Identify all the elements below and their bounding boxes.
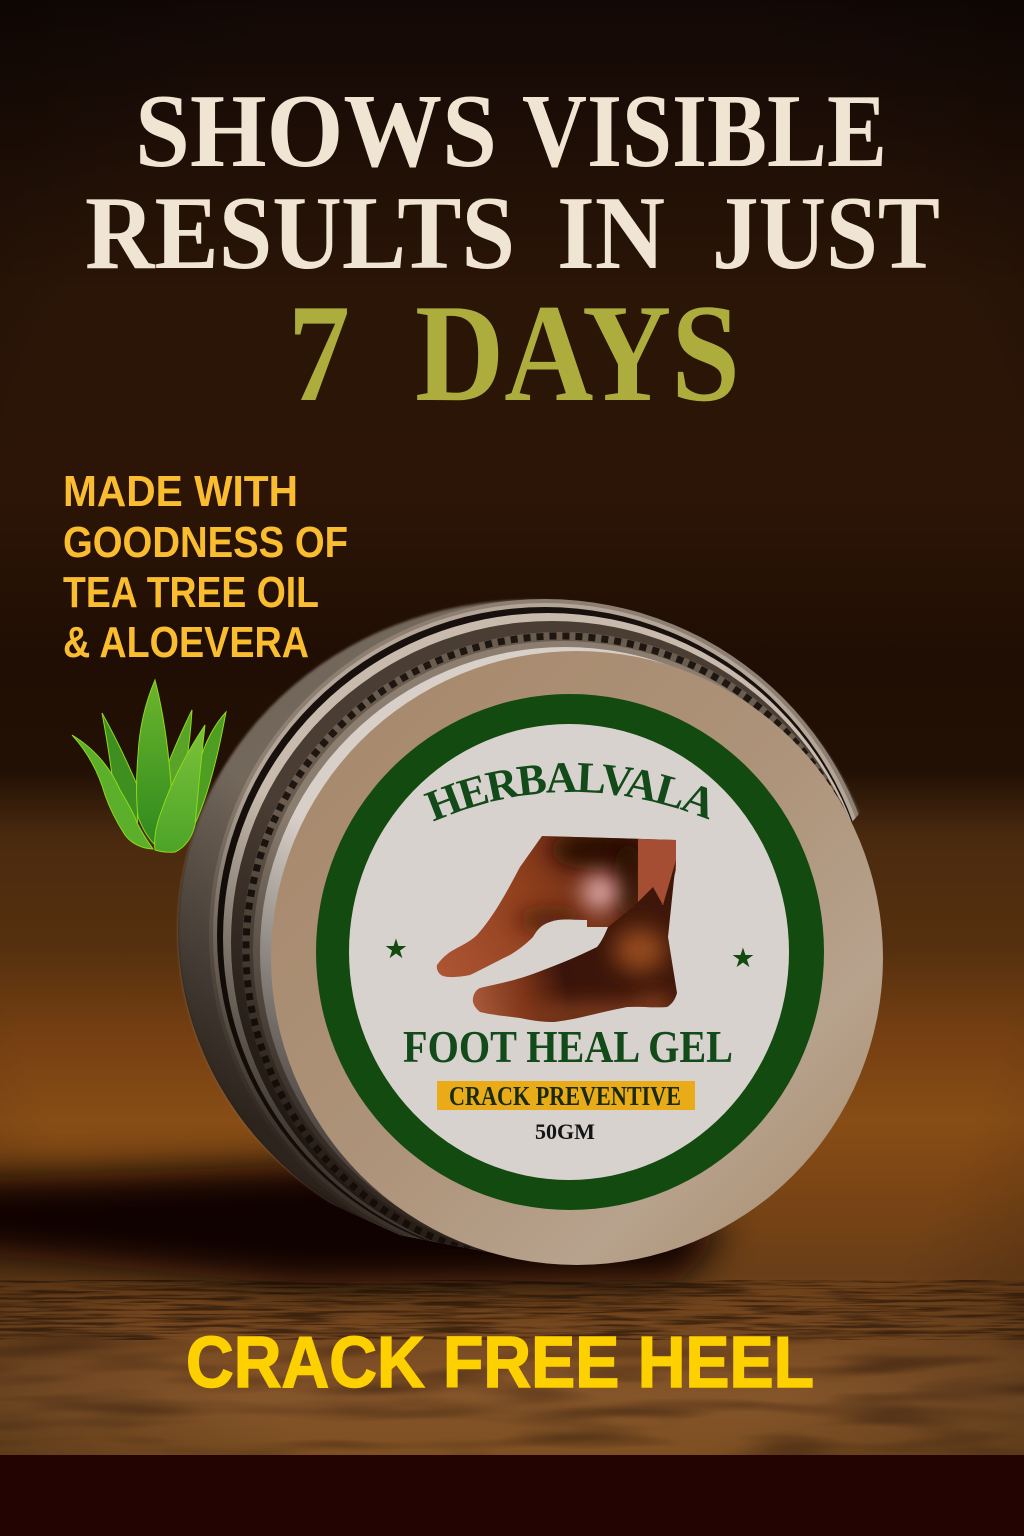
label product name: FOOT HEAL GEL: [403, 1021, 733, 1072]
title: 7: [288, 276, 350, 431]
ingredients callout: GOODNESS OF: [63, 518, 348, 567]
title: RESULTS: [85, 174, 515, 291]
title: JUST: [712, 174, 940, 291]
icon: stars: ★: [731, 943, 755, 974]
label badge: CRACK PREVENTIVE: [449, 1081, 681, 1111]
title: DAYS: [415, 276, 740, 431]
jar shadow: [0, 1160, 730, 1285]
tagline: CRACK FREE HEEL: [186, 1323, 814, 1403]
label weight: 50GM: [535, 1119, 595, 1144]
icon: stars: [384, 934, 755, 974]
ingredients callout: TEA TREE OIL: [63, 568, 319, 617]
ingredients callout: MADE WITH: [63, 467, 298, 516]
rim knurling: [246, 636, 874, 1264]
icon: feet: [436, 836, 677, 1022]
label brand: HERBALVALA: [423, 763, 710, 822]
title: SHOWS: [135, 72, 497, 189]
title: VISIBLE: [522, 72, 887, 189]
icon: stars: ★: [384, 934, 408, 965]
lid face: [271, 651, 883, 1265]
ingredients callout: & ALOEVERA: [63, 618, 309, 667]
bottom band: [0, 1455, 1024, 1536]
title: [85, 72, 940, 431]
lower-left shading: [178, 793, 492, 1253]
label ring: [316, 694, 824, 1210]
title: IN: [557, 174, 665, 291]
product: tin jar: [176, 598, 883, 1265]
label face: [349, 724, 789, 1180]
lower foot: [472, 860, 677, 1022]
icon: aloe vera: [72, 680, 226, 852]
upper foot: [436, 836, 676, 978]
ingredients callout: [63, 467, 348, 667]
jar body and rim rings: [178, 599, 882, 1271]
